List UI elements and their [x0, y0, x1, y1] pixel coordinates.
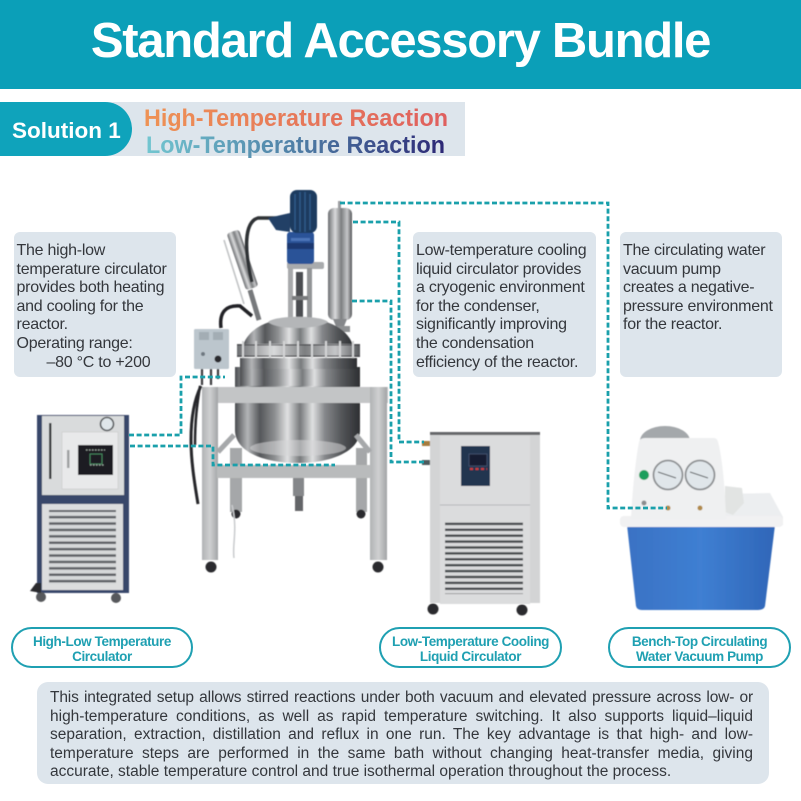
gauge	[100, 418, 114, 430]
vessel lid	[237, 317, 360, 386]
note: circulator	[14, 232, 176, 377]
note: cooling circulator: significantly improving	[416, 316, 567, 333]
ports	[422, 441, 430, 446]
nozzles	[666, 506, 670, 510]
note: vacuum pump: creates a negative-	[623, 279, 754, 296]
label: bench-top circulating water vacuum pump	[608, 627, 791, 668]
note: vacuum pump: for the reactor.	[623, 316, 722, 333]
blue tub	[627, 525, 775, 610]
note: cooling circulator: liquid circulator provides	[416, 261, 581, 278]
tray	[725, 493, 783, 525]
water vacuum pump	[620, 426, 783, 610]
display panel	[461, 446, 490, 486]
label: low-temperature cooling liquid circulator: Liquid Circulator	[420, 648, 521, 664]
stirring shaft	[287, 262, 324, 324]
bottom valve	[293, 478, 304, 511]
label: bench-top circulating water vacuum pump: Water Vacuum Pump	[636, 648, 763, 664]
power cable	[191, 386, 201, 504]
head	[631, 438, 726, 519]
note: cooling circulator	[413, 232, 596, 377]
summary text panel: accurate, stable temperature control and true isothermal operation throughout the process.	[50, 763, 671, 780]
wheels	[36, 592, 46, 602]
display	[78, 445, 113, 475]
door	[62, 432, 118, 489]
title banner	[0, 0, 801, 89]
note: vacuum pump	[620, 232, 782, 377]
note: vacuum pump: The circulating water	[623, 242, 765, 259]
vessel lower	[235, 367, 360, 463]
note: circulator: –80 °C to +200	[46, 354, 150, 371]
indicator	[639, 470, 649, 480]
summary text panel: temperature steps are performed in the same bath without changing heat-transfer media, giving	[50, 745, 753, 762]
high-temperature label: High-Temperature Reaction	[144, 105, 448, 132]
louvre	[42, 504, 123, 590]
low-temperature cooling circulator	[422, 432, 540, 616]
note: cooling circulator: for the condenser,	[416, 298, 540, 315]
blue motor	[268, 190, 317, 264]
note: cooling circulator: the condensation	[416, 335, 534, 352]
note: circulator: Operating range:	[16, 335, 133, 352]
back legs	[230, 448, 242, 512]
dome	[640, 426, 690, 456]
gauges	[654, 460, 714, 490]
note: cooling circulator: efficiency of the reactor.	[416, 354, 578, 371]
note: vacuum pump: pressure environment	[623, 298, 773, 315]
note: cooling circulator: Low-temperature cooling	[416, 242, 586, 259]
summary text panel	[37, 682, 769, 784]
low-temperature label: Low-Temperature Reaction	[146, 132, 445, 159]
note: circulator: and cooling for the	[16, 298, 143, 315]
wheels	[428, 604, 438, 614]
hoses	[247, 218, 276, 282]
control box	[194, 329, 229, 385]
connection lines	[129, 203, 667, 508]
summary text panel: high-temperature conditions, as well as rapid temperature switching. It also supports liquid–liquid	[50, 708, 753, 725]
label: high-low temperature circulator	[11, 627, 193, 668]
note: cooling circulator: a cryogenic environment	[416, 279, 585, 296]
note: circulator: The high-low	[16, 242, 105, 259]
title banner: Standard Accessory Bundle	[91, 14, 710, 68]
reactor photo illustration	[191, 190, 388, 572]
note: circulator: temperature circulator	[16, 261, 167, 278]
label: low-temperature cooling liquid circulator	[379, 627, 562, 668]
solution tab	[0, 102, 132, 156]
note: circulator: provides both heating	[16, 279, 164, 296]
solution tab: Solution 1	[12, 118, 121, 143]
note: circulator: reactor.	[16, 316, 68, 333]
condenser column	[328, 201, 352, 332]
high-low temperature circulator	[30, 415, 129, 603]
summary text panel: separation, extraction, distillation and reflux in one run. The key advantage is that high- and low-	[50, 726, 753, 743]
label: high-low temperature circulator: High-Low Temperature	[33, 634, 171, 648]
left tube	[224, 229, 259, 320]
note: vacuum pump: vacuum pump	[623, 261, 721, 278]
louvre	[445, 521, 523, 594]
frame	[202, 387, 388, 572]
label: low-temperature cooling liquid circulator: Low-Temperature Cooling	[392, 634, 549, 648]
label: high-low temperature circulator: Circulator	[72, 648, 132, 664]
summary text panel: This integrated setup allows stirred reactions under both vacuum and elevated pressure across low- or	[50, 689, 753, 706]
label: bench-top circulating water vacuum pump: Bench-Top Circulating	[632, 634, 767, 648]
